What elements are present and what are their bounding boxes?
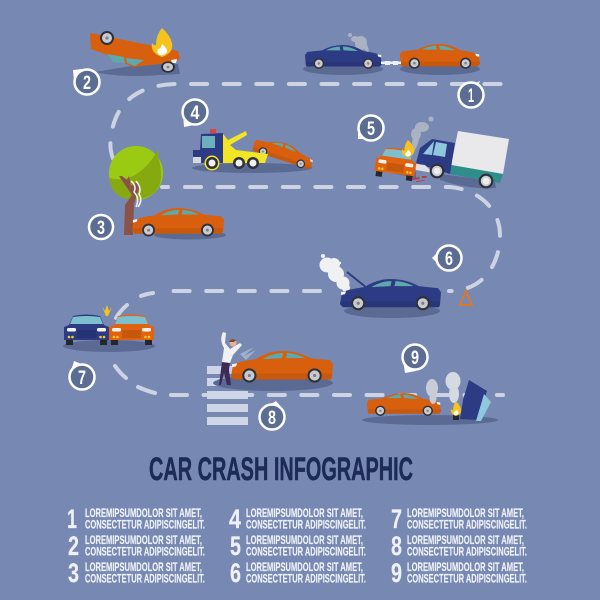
legend column 2: [229, 504, 366, 588]
legend item 7: LOREMIPSUMDOLOR SIT AMET,: [407, 506, 524, 520]
marker 4: 4: [190, 103, 200, 124]
scene 2: overturned burning car: [90, 28, 180, 76]
legend item 9: LOREMIPSUMDOLOR SIT AMET,: [407, 560, 524, 574]
legend item 3: [68, 558, 205, 588]
legend item 2: CONSECTETUR ADIPISCINGELIT.: [85, 544, 205, 558]
legend item 3: 3: [68, 558, 79, 588]
legend item 8: 8: [391, 531, 402, 561]
legend item 6: 6: [230, 558, 241, 588]
marker 3: 3: [97, 218, 105, 239]
legend item 5: LOREMIPSUMDOLOR SIT AMET,: [246, 533, 363, 547]
legend item 4: LOREMIPSUMDOLOR SIT AMET,: [246, 506, 363, 520]
marker 7: [70, 361, 94, 390]
scene 5: truck collision with small car: [374, 116, 509, 188]
legend item 4: 4: [229, 504, 241, 534]
legend item 5: 5: [230, 531, 241, 561]
legend item 2: [68, 531, 205, 561]
marker 2: [73, 69, 100, 94]
legend item 8: LOREMIPSUMDOLOR SIT AMET,: [407, 533, 524, 547]
legend item 3: CONSECTETUR ADIPISCINGELIT.: [85, 572, 205, 586]
marker 6: 6: [445, 249, 453, 270]
scene 8: crosswalk with pedestrian and car: [207, 332, 333, 425]
legend item 9: 9: [391, 558, 402, 588]
marker 8: [260, 401, 284, 430]
marker 6: [432, 246, 462, 270]
scene 1: navy car towed by orange car: [303, 33, 480, 75]
legend item 6: [230, 558, 366, 588]
marker 1: [458, 81, 484, 108]
scene 3: car hitting tree: [109, 146, 226, 240]
scene 4: tow truck with car: [192, 129, 316, 173]
legend column 1: [67, 504, 205, 588]
legend item 1: CONSECTETUR ADIPISCINGELIT.: [85, 518, 205, 532]
legend item 1: [67, 504, 205, 534]
legend item 4: [229, 504, 366, 534]
marker 9: 9: [411, 348, 419, 369]
marker 8: 8: [268, 408, 276, 429]
legend item 4: CONSECTETUR ADIPISCINGELIT.: [246, 518, 366, 532]
legend item 8: CONSECTETUR ADIPISCINGELIT.: [407, 544, 527, 558]
legend item 8: [391, 531, 527, 561]
legend item 6: LOREMIPSUMDOLOR SIT AMET,: [246, 560, 363, 574]
legend item 1: LOREMIPSUMDOLOR SIT AMET,: [85, 506, 202, 520]
marker 5: [358, 116, 384, 140]
marker 1: 1: [468, 86, 474, 107]
legend item 2: 2: [68, 531, 79, 561]
legend item 1: 1: [67, 504, 77, 534]
legend item 2: LOREMIPSUMDOLOR SIT AMET,: [85, 533, 202, 547]
legend item 3: LOREMIPSUMDOLOR SIT AMET,: [85, 560, 202, 574]
legend column 3: [391, 504, 527, 588]
legend item 5: [230, 531, 366, 561]
legend item 5: CONSECTETUR ADIPISCINGELIT.: [246, 544, 366, 558]
marker 4: [182, 100, 208, 127]
title: CAR CRASH INFOGRAPHIC: [149, 451, 413, 487]
road: dashed path: [110, 84, 503, 395]
legend item 9: CONSECTETUR ADIPISCINGELIT.: [407, 572, 527, 586]
marker 7: 7: [78, 368, 86, 389]
scene 6: broken down car with smoke and warning triangle: [320, 254, 472, 318]
marker 3: [89, 215, 113, 239]
legend item 7: CONSECTETUR ADIPISCINGELIT.: [407, 518, 527, 532]
marker 2: 2: [83, 73, 91, 94]
legend item 6: CONSECTETUR ADIPISCINGELIT.: [246, 572, 366, 586]
marker 5: 5: [367, 119, 375, 140]
legend item 7: [391, 504, 527, 534]
legend item 7: 7: [391, 504, 402, 534]
marker 9: [402, 344, 428, 373]
scene 7: head-on collision of two cars: [63, 305, 155, 352]
legend item 9: [391, 558, 527, 588]
scene 9: collision with overturned navy car: [362, 372, 498, 425]
